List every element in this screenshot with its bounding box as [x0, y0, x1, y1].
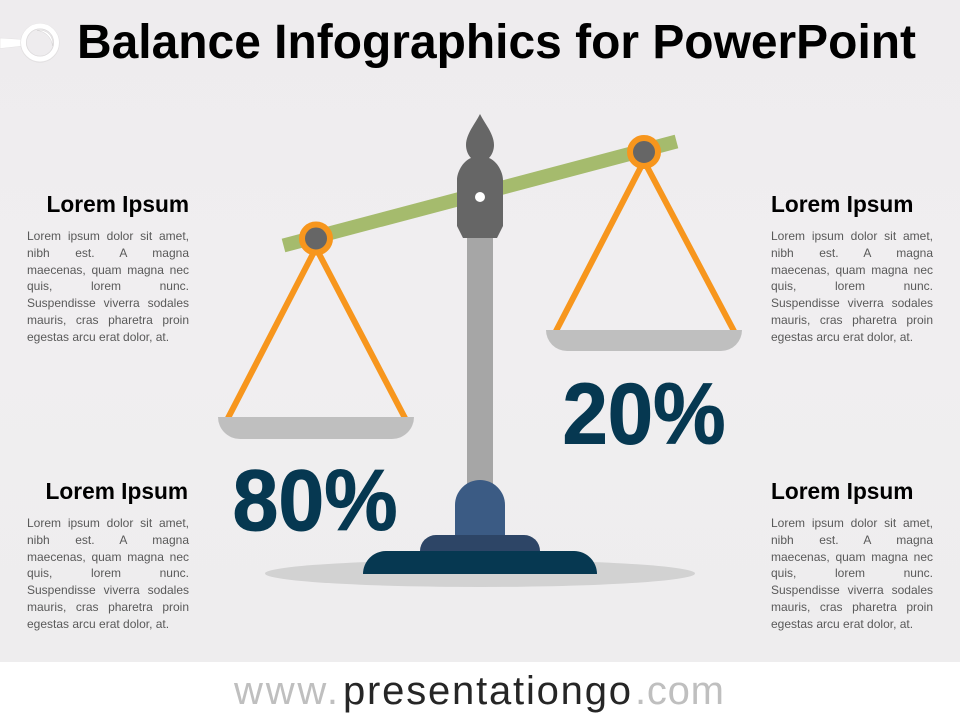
body text: nibh est. A magna [27, 533, 189, 547]
body text: Suspendisse viverra sodales [771, 583, 933, 597]
left pan strings [227, 248, 406, 420]
body text: quis, lorem nunc. [771, 279, 933, 293]
balance scale [218, 114, 742, 574]
body text [27, 516, 190, 631]
body text [771, 229, 934, 344]
body text: quis, lorem nunc. [771, 566, 933, 580]
footer url: presentationgo [343, 669, 631, 713]
value: 20%: 20% [562, 366, 726, 462]
body text [771, 516, 934, 631]
text block: bottom right [771, 478, 934, 631]
right pan [546, 330, 742, 351]
body text: maecenas, quam magna nec [27, 550, 189, 564]
heading: Lorem Ipsum [46, 478, 188, 504]
heading: Lorem Ipsum [771, 478, 913, 504]
body text: Suspendisse viverra sodales [27, 583, 189, 597]
body text: maecenas, quam magna nec [27, 263, 189, 277]
body text: mauris, cras pharetra proin [771, 313, 933, 327]
text block: top right [771, 191, 934, 344]
body text: mauris, cras pharetra proin [27, 600, 189, 614]
body text: egestas arcu erat dolor, at. [27, 617, 169, 631]
body text: egestas arcu erat dolor, at. [771, 617, 913, 631]
pivot dot [475, 192, 485, 202]
body text: maecenas, quam magna nec [771, 550, 933, 564]
title: Balance Infographics for PowerPoint [77, 16, 916, 69]
base: lower tier [363, 551, 597, 574]
heading: Lorem Ipsum [47, 191, 189, 217]
body text: quis, lorem nunc. [27, 279, 189, 293]
ground shadow [265, 560, 695, 587]
footer url [233, 669, 724, 713]
base: middle tier [420, 535, 540, 551]
logo icon: white ring and key [0, 24, 59, 62]
body text: nibh est. A magna [771, 533, 933, 547]
body text: Lorem ipsum dolor sit amet, [771, 229, 933, 243]
body text: egestas arcu erat dolor, at. [27, 330, 169, 344]
body text: mauris, cras pharetra proin [27, 313, 189, 327]
footer url: .com [635, 669, 724, 713]
body text: Suspendisse viverra sodales [27, 296, 189, 310]
body text: nibh est. A magna [27, 246, 189, 260]
right pan strings [555, 161, 735, 333]
body text: quis, lorem nunc. [27, 566, 189, 580]
body text: Lorem ipsum dolor sit amet, [27, 516, 189, 530]
column [467, 236, 493, 486]
body text [27, 229, 190, 344]
body text: egestas arcu erat dolor, at. [771, 330, 913, 344]
left pan [218, 417, 414, 439]
heading: Lorem Ipsum [771, 191, 913, 217]
value: 80%: 80% [232, 453, 398, 549]
body text: Lorem ipsum dolor sit amet, [771, 516, 933, 530]
body text: Lorem ipsum dolor sit amet, [27, 229, 189, 243]
text block: top left [27, 191, 190, 344]
body text: nibh est. A magna [771, 246, 933, 260]
finial and head [457, 114, 503, 238]
base: upper post [455, 480, 505, 535]
tilted beam [284, 142, 676, 246]
text block: bottom left [27, 478, 190, 631]
body text: Suspendisse viverra sodales [771, 296, 933, 310]
left pivot [302, 224, 330, 252]
footer url: www. [233, 669, 338, 713]
body text: maecenas, quam magna nec [771, 263, 933, 277]
body text: mauris, cras pharetra proin [771, 600, 933, 614]
right pivot [630, 138, 658, 166]
